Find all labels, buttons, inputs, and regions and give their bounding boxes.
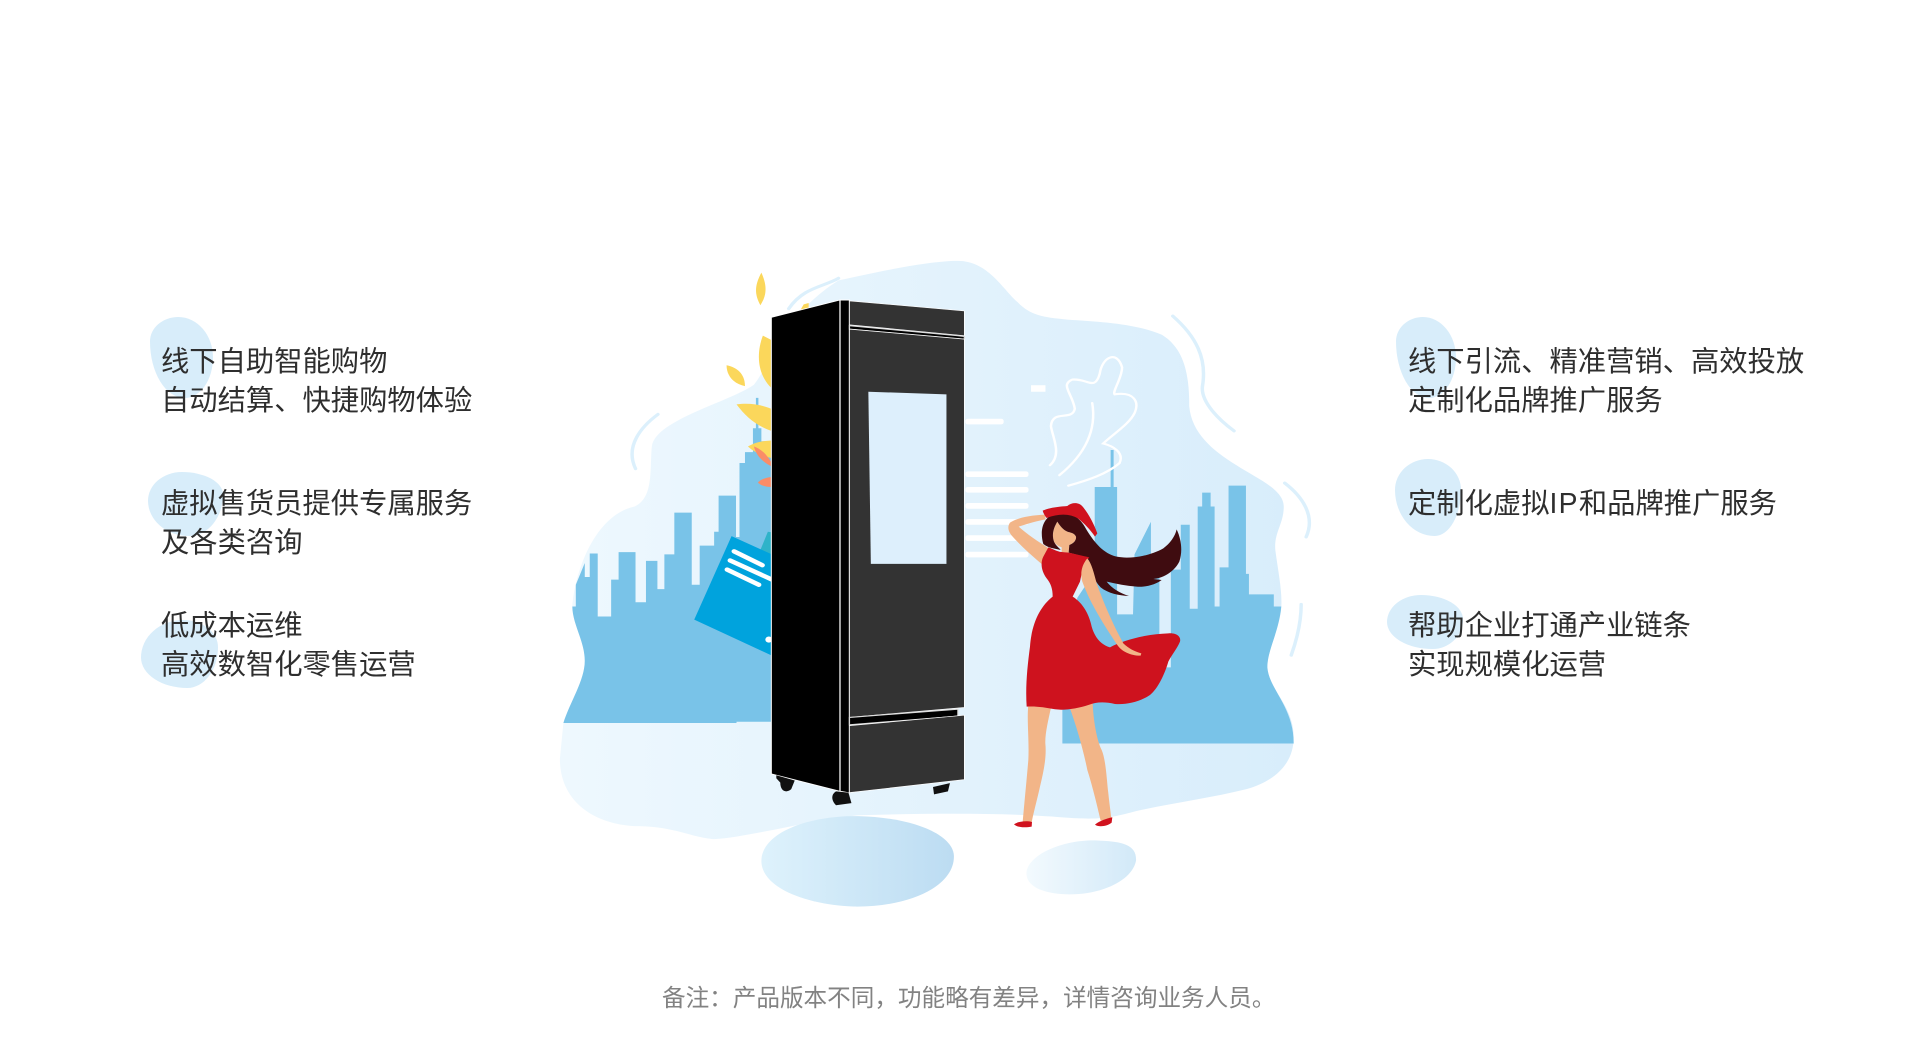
text: 定制化虚拟IP和品牌推广服务 [1408, 487, 1777, 519]
woman hair [1042, 512, 1181, 596]
text block right 1 with blob [1396, 317, 1804, 416]
blob marker [1395, 459, 1461, 536]
text [161, 345, 472, 416]
woman raised arm [1008, 515, 1049, 564]
machine wheels [776, 775, 950, 805]
machine base slot [849, 709, 958, 725]
text block right 2 with blob [1395, 459, 1777, 536]
machine top panel [849, 301, 964, 336]
ground puddle large [761, 816, 954, 907]
woman shoes [1014, 817, 1112, 827]
woman hat [1043, 503, 1097, 537]
text: 低成本运维 [161, 609, 302, 641]
text: 高效数智化零售运营 [161, 648, 416, 680]
text: 实现规模化运营 [1408, 648, 1606, 680]
machine corner strip [840, 300, 849, 793]
text: 线下引流、精准营销、高效投放 [1408, 345, 1804, 377]
blob marker [150, 317, 213, 398]
woman figure [1008, 503, 1181, 827]
text [161, 609, 416, 680]
text [161, 487, 472, 558]
machine lower panel [849, 715, 964, 793]
woman dress [1026, 547, 1180, 710]
blob marker [1396, 317, 1456, 398]
woman neck and face [1053, 522, 1076, 553]
vending machine [771, 300, 964, 805]
left skyline [563, 398, 774, 723]
text [1408, 345, 1804, 416]
blob marker [141, 620, 218, 688]
text: 定制化品牌推广服务 [1408, 384, 1663, 416]
background blob [560, 261, 1294, 839]
right skyline [1062, 450, 1294, 743]
blob marker [148, 472, 223, 536]
ground puddle small [1026, 840, 1136, 894]
text: 帮助企业打通产业链条 [1408, 609, 1691, 641]
text block left 2 with blob [148, 472, 472, 558]
woman lower arm [1081, 558, 1141, 656]
footnote: 备注：产品版本不同，功能略有差异，详情咨询业务人员。 [662, 986, 1275, 1012]
woman legs [1023, 703, 1111, 823]
text block right 3 with blob [1387, 595, 1691, 680]
machine door [849, 329, 964, 717]
text: 线下自助智能购物 [161, 345, 387, 377]
text: 及各类咨询 [161, 526, 302, 558]
text: 自动结算、快捷购物体验 [161, 384, 472, 416]
decorative swirl lines [632, 278, 1309, 655]
yellow and orange leaves [727, 273, 809, 557]
text: 虚拟售货员提供专属服务 [161, 487, 472, 519]
machine side panel [771, 300, 840, 791]
text block left 3 with blob [141, 609, 416, 688]
white window bars [965, 385, 1045, 557]
white leaf outline [1050, 357, 1136, 486]
machine screen [868, 392, 946, 564]
text block left 1 with blob [150, 317, 472, 416]
blue document card [694, 536, 774, 657]
text [1408, 609, 1691, 680]
blob marker [1387, 595, 1463, 649]
